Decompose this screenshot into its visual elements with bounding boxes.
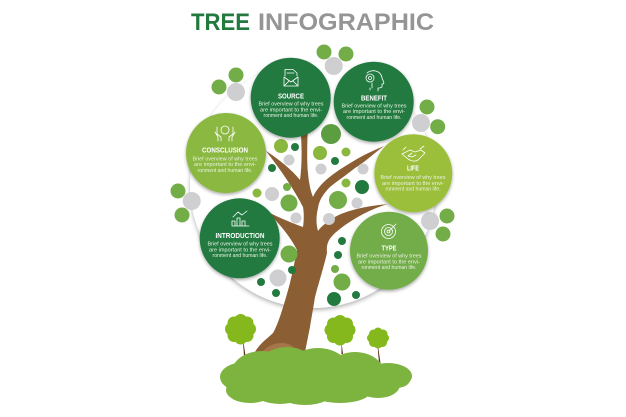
icon: target xyxy=(382,224,396,238)
panel: conclusion: Brief overview of why trees xyxy=(192,156,258,162)
panel: conclusion xyxy=(186,113,266,193)
panel: type xyxy=(350,212,428,290)
panel: source: are important to the envi- xyxy=(260,107,322,113)
panel: type: ronment and human life. xyxy=(362,265,416,271)
panel: benefit: ronment and human life. xyxy=(346,115,402,121)
panel: life: Brief overview of why trees xyxy=(380,175,446,181)
icon: hands with coin xyxy=(215,126,235,141)
panel: type: Brief overview of why trees xyxy=(356,254,422,260)
panel: conclusion: are important to the envi- xyxy=(194,162,256,168)
panel: conclusion: ronment and human life. xyxy=(198,168,252,174)
small trees xyxy=(225,314,389,363)
panel: introduction xyxy=(200,198,280,278)
panel: introduction: INTRODUCTION xyxy=(216,233,264,240)
panel: source: ronment and human life. xyxy=(264,113,318,119)
title: INFOGRAPHIC xyxy=(258,9,434,36)
panel: conclusion: CONSCLUSION xyxy=(202,148,248,154)
panel: benefit: Brief overview of why trees xyxy=(342,103,407,109)
panel: benefit xyxy=(334,62,414,142)
panel: type: TYPE xyxy=(382,246,397,252)
panel: source xyxy=(251,58,331,138)
icon: head with gear xyxy=(366,71,384,91)
panel: life: are important to the envi- xyxy=(382,181,444,187)
panel: life: ronment and human life. xyxy=(386,186,440,192)
panel: introduction: are important to the envi- xyxy=(209,247,271,253)
panel: type: are important to the envi- xyxy=(358,259,420,265)
title xyxy=(191,9,434,36)
ground bush xyxy=(220,347,412,405)
icon: bar chart xyxy=(232,211,249,226)
backdrop circle xyxy=(190,62,436,308)
panel: introduction: ronment and human life. xyxy=(212,253,268,259)
panel: benefit: are important to the envi- xyxy=(343,109,405,115)
panel: source: Brief overview of why trees xyxy=(258,102,324,108)
panel: life: LIFE xyxy=(407,166,419,172)
panel: introduction: Brief overview of why trees xyxy=(208,242,273,248)
panel: source: SOURCE xyxy=(278,94,304,100)
inner dots xyxy=(252,124,369,306)
outer dot clusters xyxy=(170,44,454,242)
tree trunk and branches xyxy=(255,130,388,352)
icon: handshake xyxy=(402,146,425,161)
panel: life xyxy=(374,134,452,212)
icon: envelope xyxy=(284,70,298,86)
panel: benefit: BENEFIT xyxy=(361,96,388,102)
title: TREE xyxy=(191,9,250,36)
